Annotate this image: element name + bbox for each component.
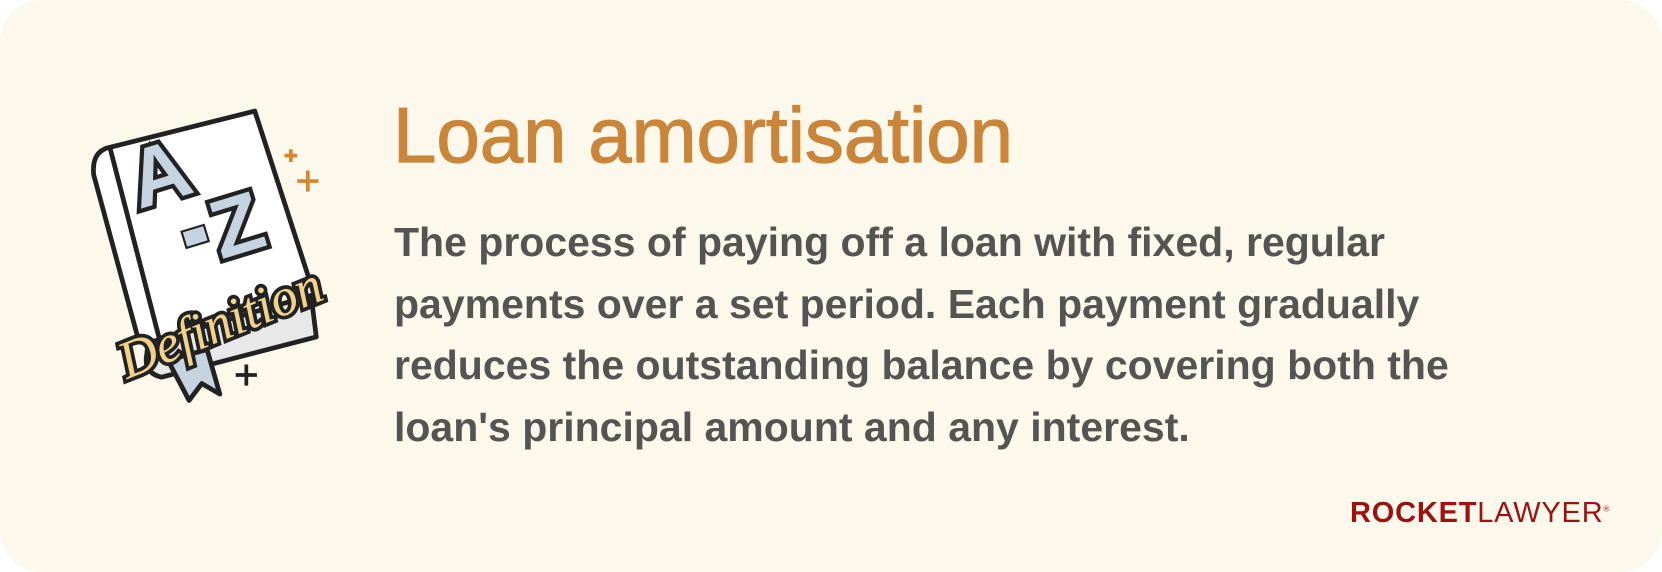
body text: loan's principal amount and any interest. [394, 404, 1190, 450]
logo: ROCKETLAWYER® [1350, 497, 1610, 529]
icon: definition book [91, 108, 331, 403]
bookmark [168, 350, 220, 400]
body text: reduces the outstanding balance by covering both the [394, 342, 1449, 388]
letters A-Z [117, 104, 275, 295]
letters A-Z: Z [199, 173, 275, 277]
letters A-Z: A [117, 120, 202, 226]
sparkles [284, 149, 318, 192]
title: Loan amortisation [393, 91, 1013, 179]
body text: payments over a set period. Each payment gradually [394, 280, 1419, 326]
body text [394, 219, 1449, 450]
icon label: Definition script: Definition [109, 256, 331, 391]
body text: The process of paying off a loan with fixed, regular [394, 219, 1385, 265]
front cover [93, 111, 314, 343]
page block [146, 294, 316, 377]
